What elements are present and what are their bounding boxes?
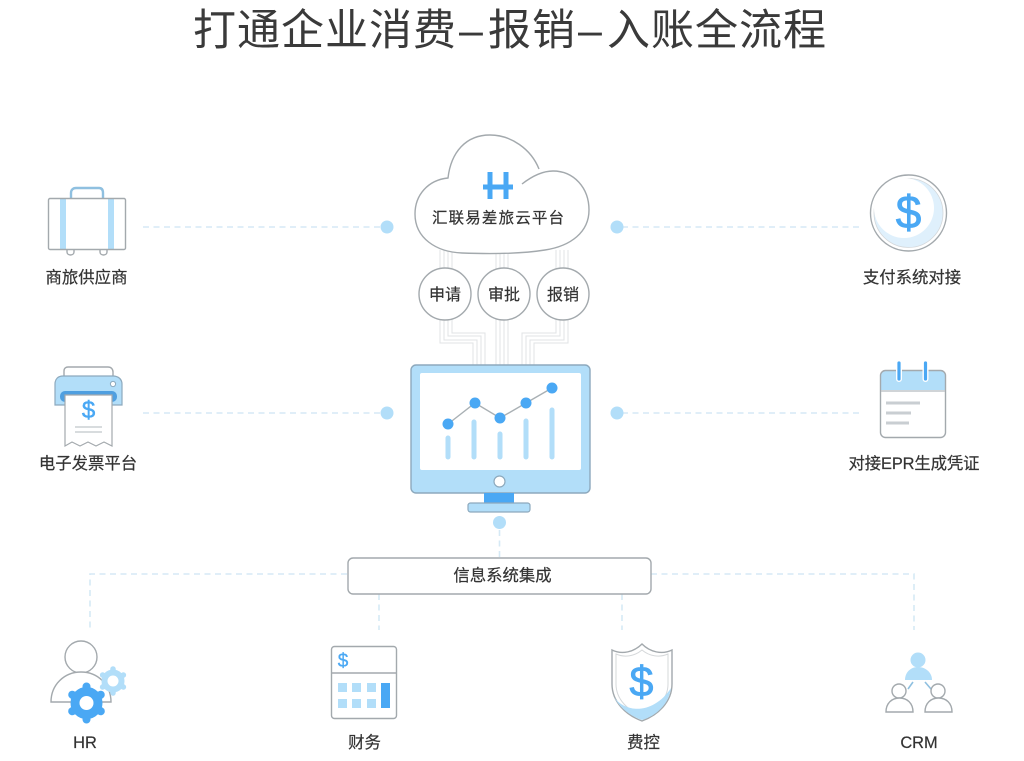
icon: finance calculator: $ — [338, 651, 349, 672]
module: approval — [478, 268, 530, 320]
circuit traces between cloud, modules and monitor — [440, 250, 568, 365]
information system integration box: 信息系统集成 — [453, 567, 552, 585]
icon: voucher calendar — [880, 363, 946, 438]
module: reimbursement — [537, 268, 589, 320]
label: HR: HR — [73, 734, 97, 752]
icon: HR person with gears — [51, 641, 123, 720]
icon: invoice printer: $ — [82, 397, 95, 424]
label: payment system integration: 支付系统对接 — [863, 269, 961, 287]
label: e-invoice platform: 电子发票平台 — [39, 455, 137, 473]
cloud label: 汇联易差旅云平台 — [432, 209, 564, 227]
module: reimbursement: 报销 — [547, 286, 579, 304]
monitor body — [411, 365, 590, 493]
icon: CRM people — [886, 652, 952, 712]
connector: business travel supplier to cloud — [143, 220, 394, 234]
information system integration box — [348, 558, 651, 594]
icon: invoice printer — [55, 367, 122, 446]
label: finance: 财务 — [348, 734, 381, 752]
label: CRM: CRM — [900, 734, 938, 752]
icon: suitcase — [48, 188, 126, 255]
icon: payment coin: $ — [896, 186, 921, 238]
icon: cloud platform — [415, 135, 589, 254]
icon: platform logo — [483, 172, 513, 199]
module: approval: 审批 — [488, 286, 520, 304]
bar chart — [448, 410, 552, 457]
title: 打通企业消费–报销–入账全流程 — [193, 7, 826, 55]
icon: payment coin — [870, 175, 946, 251]
label: business travel supplier: 商旅供应商 — [46, 268, 127, 287]
label: expense control: 费控 — [627, 734, 660, 752]
module: application: 申请 — [429, 286, 461, 304]
module: application — [419, 268, 471, 320]
icon: monitor with chart — [411, 365, 590, 512]
icon: expense control shield: $ — [630, 658, 654, 706]
connector: monitor to integration box — [493, 516, 506, 557]
connector: e-invoice platform to monitor — [143, 406, 394, 420]
connector tree to bottom systems — [90, 574, 914, 630]
icon: expense control shield — [612, 644, 672, 721]
line chart — [442, 382, 558, 430]
connector: monitor to ERP voucher — [610, 406, 862, 420]
connector: cloud to payment system — [610, 220, 862, 234]
label: ERP voucher generation: 对接EPR生成凭证 — [848, 455, 980, 473]
icon: finance calculator — [332, 646, 396, 718]
monitor stand — [484, 493, 514, 503]
